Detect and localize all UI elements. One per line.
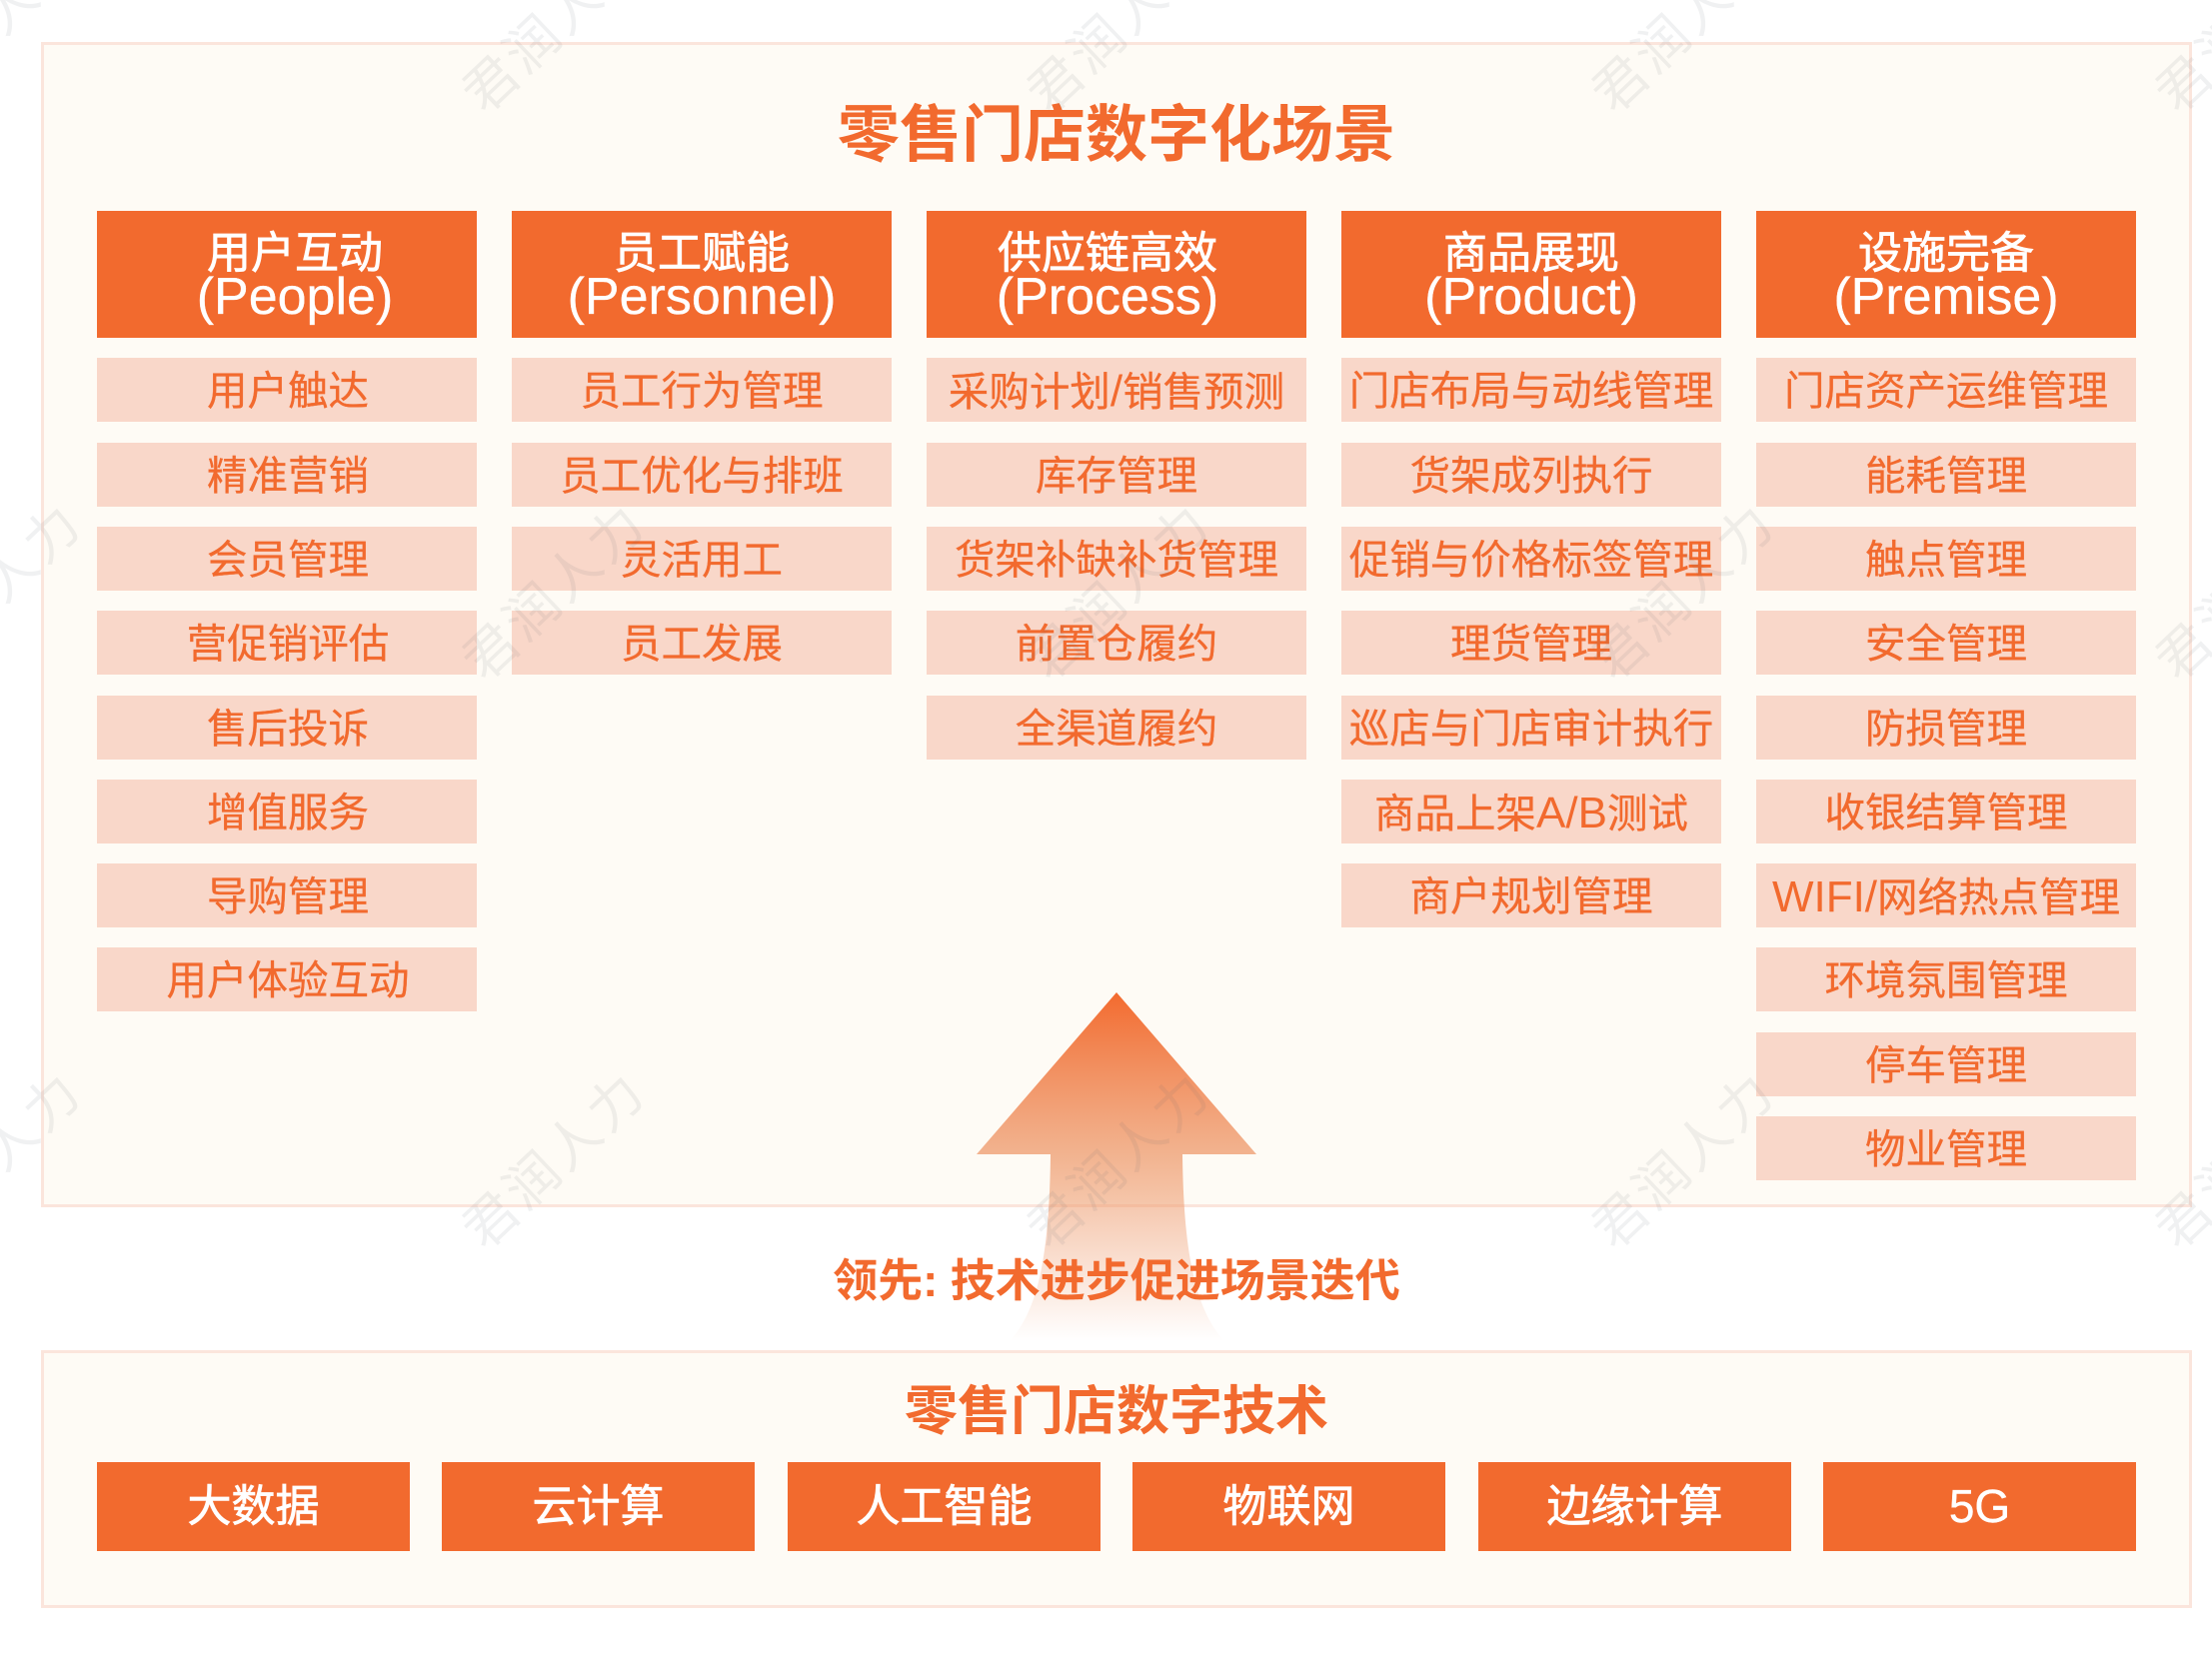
column header: people: (People): [197, 268, 393, 326]
column header: product: 商品展现: [1443, 229, 1619, 278]
item: [512, 527, 892, 591]
heading: retail store digital technology: 零售门店数字技术: [905, 1382, 1328, 1441]
item: [1756, 780, 2136, 843]
item: 采购计划/销售预测: [949, 367, 1284, 416]
item: 停车管理: [1865, 1042, 2027, 1088]
item: 灵活用工: [621, 537, 783, 583]
item: [1756, 527, 2136, 591]
item: [1756, 358, 2136, 422]
item: 员工优化与排班: [560, 453, 844, 499]
column: process: [927, 211, 1306, 760]
technology button: [1478, 1462, 1791, 1551]
item: [1756, 611, 2136, 675]
technology button: 云计算: [532, 1482, 664, 1531]
caption: leading technology progress: 领先: 技术进步促进场景迭代: [833, 1255, 1400, 1306]
item: 门店布局与动线管理: [1349, 368, 1713, 414]
technology button: 5G: [1949, 1480, 2010, 1532]
item: [927, 527, 1306, 591]
panel: retail store digital scenarios: [41, 42, 2192, 1207]
column header: process: (Process): [997, 268, 1218, 326]
item: [1756, 696, 2136, 760]
item: [927, 611, 1306, 675]
item: [97, 358, 477, 422]
item: [512, 443, 892, 507]
column header: people: [97, 211, 477, 338]
item: [1756, 947, 2136, 1011]
item: 前置仓履约: [1016, 621, 1217, 667]
item: 精准营销: [207, 453, 369, 499]
item: 门店资产运维管理: [1784, 368, 2108, 414]
column header: process: [927, 211, 1306, 338]
item: 全渠道履约: [1016, 706, 1217, 752]
item: [1341, 780, 1721, 843]
column: premise: [1756, 211, 2136, 1180]
item: 增值服务: [207, 790, 369, 835]
watermarks: 君润人力: [1572, 483, 1790, 695]
item: 能耗管理: [1865, 453, 2027, 499]
item: 物业管理: [1865, 1126, 2027, 1172]
item: [97, 863, 477, 927]
watermarks: 君润人力: [443, 1051, 661, 1263]
item: 安全管理: [1865, 621, 2027, 667]
column header: personnel: [512, 211, 892, 338]
item: 导购管理: [207, 873, 369, 919]
watermarks: 君润人力: [443, 483, 661, 695]
technology button: [1823, 1462, 2136, 1551]
technology button: [1132, 1462, 1445, 1551]
column header: premise: 设施完备: [1858, 229, 2034, 278]
column header: personnel: (Personnel): [568, 268, 836, 326]
item: [1341, 696, 1721, 760]
item: 巡店与门店审计执行: [1349, 706, 1713, 752]
item: [1341, 443, 1721, 507]
item: 用户触达: [207, 368, 369, 414]
column header: premise: [1756, 211, 2136, 338]
item: [97, 947, 477, 1011]
watermarks: 君润人力: [1008, 483, 1225, 695]
item: [927, 443, 1306, 507]
column: people: [97, 211, 477, 1011]
item: [1756, 1116, 2136, 1180]
item: [97, 696, 477, 760]
item: [1756, 443, 2136, 507]
column header: premise: (Premise): [1833, 268, 2059, 326]
item: [97, 611, 477, 675]
technology button: [442, 1462, 755, 1551]
column header: product: (Product): [1424, 268, 1638, 326]
technology button: [788, 1462, 1101, 1551]
item: 商品上架A/B测试: [1374, 789, 1688, 837]
item: [97, 527, 477, 591]
item: 货架补缺补货管理: [955, 537, 1278, 583]
item: 货架成列执行: [1409, 453, 1653, 499]
watermarks: 君润人力: [1572, 1051, 1790, 1263]
column header: process: 供应链高效: [998, 229, 1217, 278]
item: 环境氛围管理: [1825, 957, 2067, 1003]
item: [927, 358, 1306, 422]
item: [1341, 358, 1721, 422]
item: 防损管理: [1865, 706, 2027, 752]
title: main heading: 零售门店数字化场景: [838, 101, 1395, 170]
item: 库存管理: [1036, 453, 1197, 499]
item: [1756, 1032, 2136, 1096]
item: [1341, 611, 1721, 675]
item: [512, 611, 892, 675]
column: product: [1341, 211, 1721, 927]
item: 理货管理: [1450, 621, 1612, 667]
item: [1341, 863, 1721, 927]
technology button: 物联网: [1223, 1482, 1355, 1531]
item: 商户规划管理: [1409, 873, 1653, 919]
item: 触点管理: [1865, 537, 2027, 583]
technology button: [97, 1462, 410, 1551]
item: 员工行为管理: [580, 368, 824, 414]
item: 员工发展: [621, 621, 783, 667]
item: 会员管理: [207, 537, 369, 583]
item: [512, 358, 892, 422]
column header: personnel: 员工赋能: [614, 229, 790, 278]
column header: product: [1341, 211, 1721, 338]
item: 售后投诉: [207, 706, 369, 752]
item: 用户体验互动: [166, 957, 410, 1003]
panel: retail store digital technology: [41, 1350, 2192, 1608]
item: [927, 696, 1306, 760]
item: [97, 443, 477, 507]
item: [97, 780, 477, 843]
technology button: 人工智能: [856, 1482, 1032, 1531]
item: [1341, 527, 1721, 591]
technology button: 大数据: [188, 1482, 320, 1531]
item: 促销与价格标签管理: [1349, 537, 1713, 583]
watermarks: 君润人力: [1008, 1051, 1225, 1263]
technology button: 边缘计算: [1547, 1482, 1723, 1531]
item: WIFI/网络热点管理: [1772, 872, 2120, 921]
item: 营促销评估: [187, 621, 389, 667]
column: personnel: [512, 211, 892, 675]
item: 收银结算管理: [1825, 790, 2067, 835]
column header: people: 用户互动: [207, 229, 383, 278]
